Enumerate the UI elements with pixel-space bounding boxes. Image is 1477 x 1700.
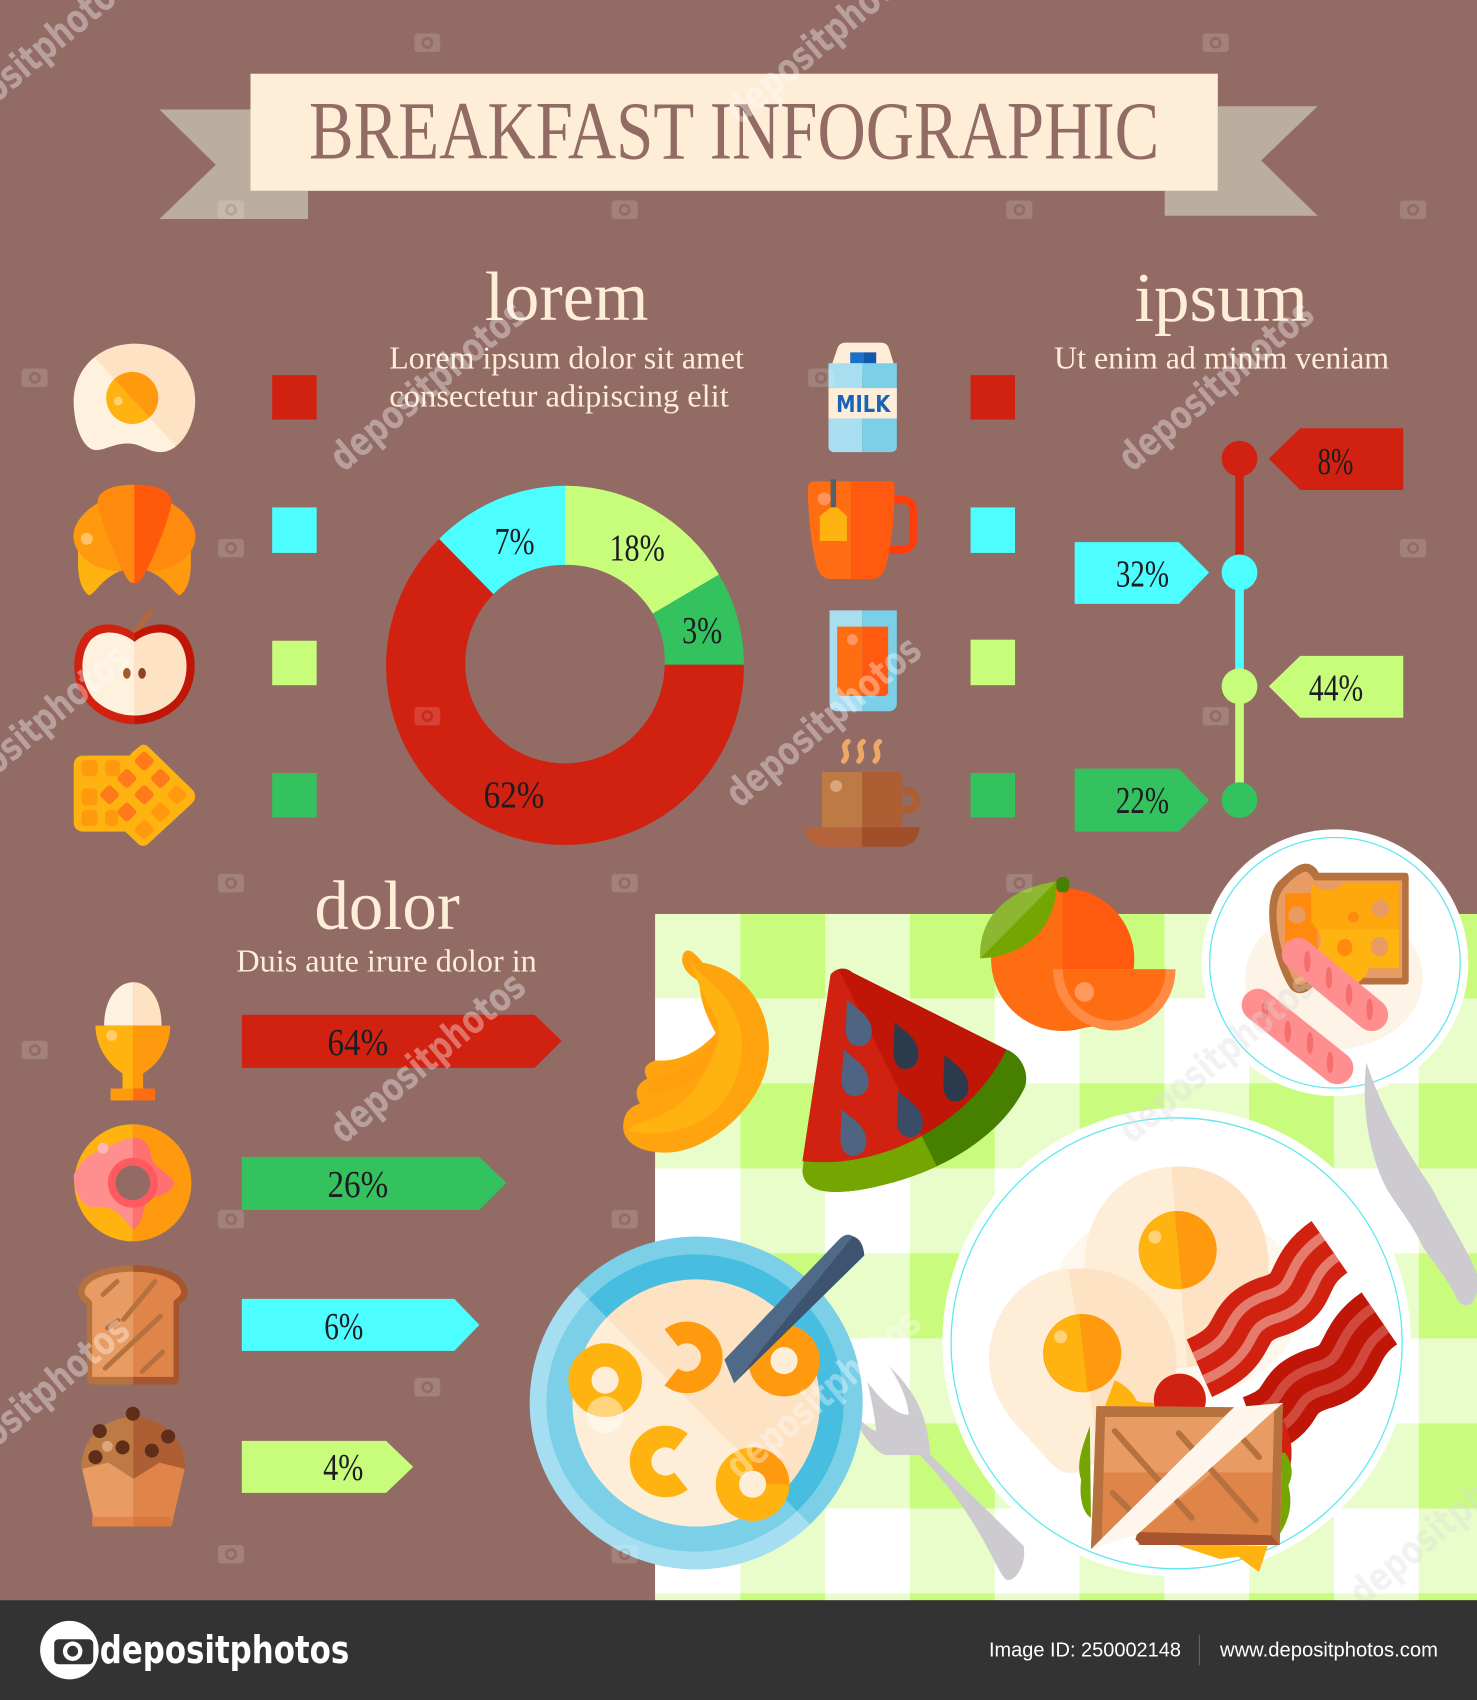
chart: timeline	[1075, 428, 1403, 832]
tag 22%: 22%	[1116, 780, 1169, 822]
text: ipsum line: Ut enim ad minim veniam	[1054, 341, 1389, 376]
sandwich left half	[1091, 1406, 1234, 1549]
spoon	[724, 1235, 864, 1383]
donut labels: 7%	[495, 521, 535, 563]
illustration: cereal bowl	[530, 1235, 864, 1569]
sausage 2	[1258, 999, 1337, 1073]
illustration: banana	[623, 950, 769, 1153]
bar chart: dolor	[242, 1015, 562, 1493]
illustration: fork	[844, 1366, 1024, 1580]
heading: lorem: lorem	[485, 259, 648, 336]
legend: ipsum swatches	[971, 375, 1015, 817]
footer url: www.depositphotos.com	[1219, 1639, 1438, 1662]
donut segment green 3%	[653, 575, 744, 665]
orange slice	[1053, 969, 1176, 1031]
icon: juice glass	[830, 610, 897, 711]
illustration: knife	[1365, 1062, 1477, 1305]
panel: ipsum heading block	[1054, 260, 1389, 376]
tag 44%: 44%	[1309, 667, 1363, 709]
icon: apple	[74, 610, 195, 724]
donut labels	[484, 521, 722, 817]
watermelon rind	[802, 969, 1026, 1192]
front egg	[989, 1268, 1177, 1473]
illustration: small plate	[1202, 829, 1468, 1096]
watermarks: depositphotos	[321, 291, 535, 480]
tag 32%	[1075, 542, 1209, 604]
icon: coffee cup	[805, 742, 920, 847]
watermarks: depositphotos	[1110, 963, 1323, 1153]
bar 26%	[242, 1157, 506, 1210]
footer bar	[0, 1600, 1477, 1700]
cereal rings	[568, 1325, 820, 1521]
bar 64%	[242, 1015, 562, 1068]
icon: croissant	[73, 485, 195, 595]
banner ribbon right	[1165, 106, 1318, 216]
icon: milk carton: MILK	[836, 392, 891, 418]
panel: dolor heading block	[236, 868, 537, 978]
icon: milk carton	[829, 343, 897, 452]
back egg	[1084, 1166, 1269, 1368]
watermarks: depositphotos	[1110, 291, 1323, 480]
illustration: orange	[980, 877, 1176, 1031]
orange leaf	[980, 881, 1056, 958]
panel: gingham tablecloth	[655, 914, 1477, 1600]
icon: donut	[74, 1124, 191, 1241]
donut segment lime 18%	[565, 486, 719, 614]
watermelon seeds	[840, 1000, 968, 1156]
watermarks: depositphotos	[321, 963, 535, 1153]
toast with cheese	[1269, 864, 1409, 993]
text: lorem line 1: Lorem ipsum dolor sit amet	[389, 341, 744, 376]
timeline nodes	[1222, 441, 1257, 818]
icon: boiled egg in cup	[95, 982, 170, 1100]
bar 4%	[242, 1441, 413, 1493]
timeline lines	[1235, 459, 1244, 800]
tag 44%	[1269, 656, 1403, 718]
watermelon flesh	[802, 969, 1006, 1162]
donut segment cyan 7%	[439, 486, 565, 594]
icon: fried egg	[74, 344, 195, 452]
watermarks: depositphotos	[717, 1299, 930, 1489]
title: BREAKFAST INFOGRAPHIC	[309, 85, 1159, 176]
banner ribbon left	[159, 110, 308, 219]
footer image id: Image ID: 250002148	[989, 1639, 1181, 1662]
sandwich right half	[1138, 1403, 1283, 1545]
sausage 1	[1298, 951, 1373, 1020]
sandwich	[1079, 1374, 1292, 1572]
tag 8%	[1269, 428, 1403, 490]
tag 32%: 32%	[1116, 554, 1169, 596]
bar 4%: 4%	[323, 1447, 363, 1489]
donut labels: 18%	[609, 528, 665, 570]
bar 6%	[242, 1299, 479, 1351]
icon: waffle	[74, 745, 195, 846]
banner plate	[251, 74, 1218, 191]
heading: ipsum: ipsum	[1134, 260, 1308, 337]
text: dolor line: Duis aute irure dolor in	[236, 943, 537, 978]
icon: muffin	[81, 1407, 185, 1527]
bacon strip 1	[1199, 1247, 1330, 1368]
legend: lorem swatches	[272, 375, 317, 817]
footer logo icon	[40, 1621, 99, 1679]
donut segment red 62%	[386, 539, 744, 845]
sandwich diagonal cut	[1091, 1403, 1283, 1549]
icon: toast	[78, 1265, 188, 1385]
text: lorem line 2: consectetur adipiscing elit	[389, 379, 729, 414]
title banner	[159, 74, 1318, 219]
panel: lorem heading block	[389, 259, 744, 414]
donut labels: 62%	[484, 775, 544, 817]
footer logo text: depositphotos	[100, 1628, 349, 1672]
bacon strip 2	[1254, 1318, 1379, 1427]
bar 6%: 6%	[324, 1306, 363, 1348]
tag 22%	[1075, 769, 1209, 832]
icon: tea mug	[808, 479, 913, 579]
watermarks: depositphotos	[717, 627, 930, 816]
illustration: large plate	[942, 1108, 1411, 1576]
chart: donut	[386, 486, 744, 845]
tag 8%: 8%	[1318, 441, 1353, 483]
heading: dolor: dolor	[314, 868, 460, 945]
donut labels: 3%	[682, 610, 722, 652]
illustration: watermelon slice	[802, 969, 1026, 1192]
bar 26%: 26%	[327, 1164, 388, 1206]
bar 64%: 64%	[327, 1022, 388, 1064]
sandwich score marks	[1113, 1431, 1259, 1520]
